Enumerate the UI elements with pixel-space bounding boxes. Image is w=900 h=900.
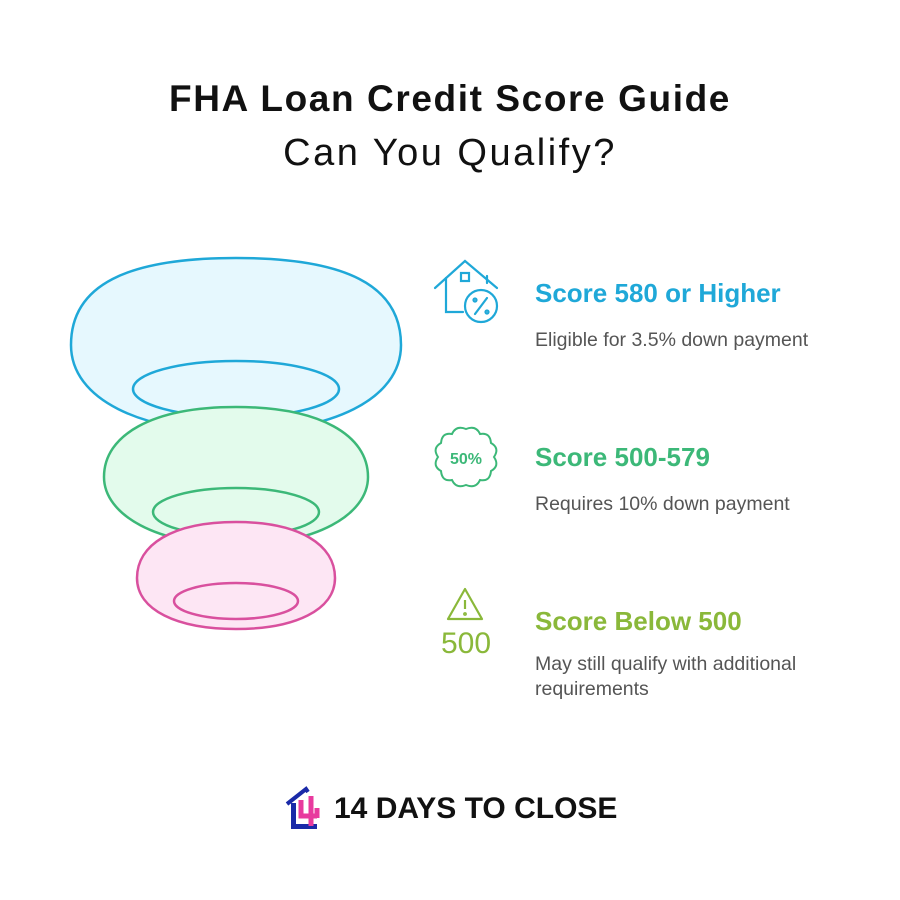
item 3 heading: Score Below 500 — [535, 606, 742, 636]
logo — [286, 786, 617, 829]
item 2 text: Requires 10% down payment — [535, 493, 790, 515]
icon: 50% badge: 50% — [450, 451, 482, 468]
icon: warning 500 — [441, 589, 491, 660]
icon: warning 500: 500 — [441, 627, 491, 660]
title: FHA Loan Credit Score Guide — [169, 78, 731, 119]
logo: 14 DAYS TO CLOSE — [334, 792, 617, 825]
item 1 text: Eligible for 3.5% down payment — [535, 329, 808, 351]
icon: house percent — [435, 261, 497, 322]
item 1 heading: Score 580 or Higher — [535, 278, 781, 308]
item 3 text: May still qualify with additional requirements — [535, 653, 796, 700]
item 2 heading: Score 500-579 — [535, 442, 710, 472]
subtitle: Can You Qualify? — [283, 132, 617, 174]
icon: 50% badge — [436, 428, 496, 486]
